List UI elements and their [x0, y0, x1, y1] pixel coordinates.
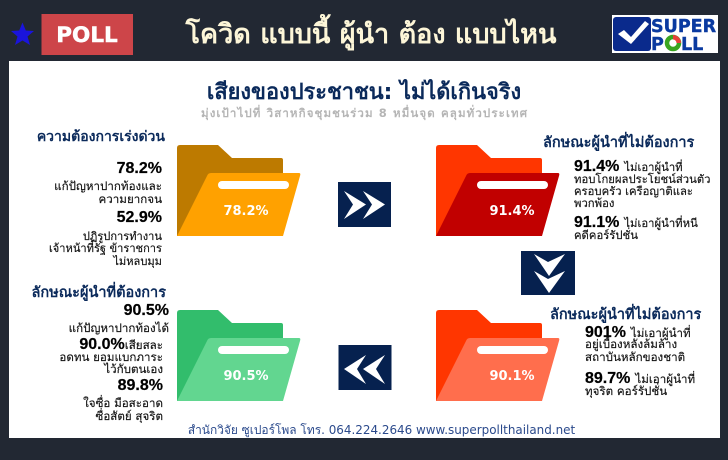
folder: red 91.4: 91.4% — [489, 204, 535, 219]
text: 91.4: ทอบโกยผลประโยชน์ส่วนตัว — [574, 172, 710, 186]
text: sacrifice: อดทน ยอมแบกภาระ — [59, 350, 163, 364]
heading: unwanted leader: ลักษณะผู้นำที่ไม่ต้องการ — [543, 131, 695, 151]
folder: orange 78.2: 78.2% — [223, 204, 269, 219]
logo: super poll: LL — [681, 35, 703, 55]
heading: urgent needs: ความต้องการเร่งด่วน — [37, 129, 165, 145]
text: 91.1: ไม่เอาผู้นำที่หนี — [623, 215, 698, 230]
text: reform: ปฏิรูปการทำงาน — [83, 230, 162, 243]
stat: 89.8: 89.8% — [118, 377, 163, 394]
text: honest: ซื่อสัตย์ สุจริต — [95, 408, 163, 423]
text: 90.1: อยู่เบื้องหลังล้มล้าง — [585, 335, 677, 352]
text: 90.1: สถาบันหลักของชาติ — [585, 350, 685, 364]
text: sacrifice: ไว้กับตนเอง — [103, 362, 163, 376]
text: 91.4: พวกพ้อง — [574, 197, 614, 210]
logo: super poll: SUPER — [651, 17, 717, 37]
icon: blue star — [11, 22, 34, 45]
folder: coral 90.1: 90.1% — [489, 369, 535, 384]
arrow: down — [521, 251, 575, 295]
folder: green 90.5: 90.5% — [223, 369, 269, 384]
badge: poll — [42, 14, 133, 55]
panel: unwanted leader text bottom — [550, 303, 702, 398]
text: economy: แก้ปัญหาปากท้องได้ — [69, 321, 169, 335]
text: 91.1: 91.1% — [574, 214, 619, 231]
text: reform: เจ้าหน้าที่รัฐ ข้าราชการ — [49, 240, 162, 255]
text: 89.7: 89.7% — [585, 370, 630, 387]
heading: desired leader: ลักษณะผู้นำที่ต้องการ — [32, 281, 166, 301]
stat: 90.5: 90.5% — [124, 302, 169, 319]
badge: poll: POLL — [56, 23, 118, 48]
stat: 52.9: 52.9% — [117, 209, 162, 226]
logo: super poll — [612, 15, 718, 55]
text: 89.7: ไม่เอาผู้นำที่ — [634, 371, 695, 387]
logo: super poll: P — [651, 35, 664, 55]
subheading: มุ่งเป้าไปที่ วิสาหกิจชุมชนร่วม 8 หมื่นจุด คลุมทั่วประเทศ — [201, 104, 528, 121]
panel: unwanted leader text top — [543, 131, 710, 242]
text: 91.4: 91.4% — [574, 158, 619, 175]
text: 90.1: ไม่เอาผู้นำที่ — [630, 325, 691, 341]
text: 91.4: ไม่เอาผู้นำที่ — [623, 159, 683, 174]
stat: 78.2: 78.2% — [117, 160, 162, 177]
folder: green 90.5 — [177, 310, 300, 401]
arrow: right — [338, 182, 391, 227]
footer: contact: สำนักวิจัย ซูเปอร์โพล โทร. 064.224.2646 www.superpollthailand.net — [188, 423, 575, 438]
folder: red 91.4 — [436, 145, 559, 236]
heading: unwanted leader: ลักษณะผู้นำที่ไม่ต้องการ — [550, 303, 702, 323]
arrow: left — [338, 345, 392, 390]
text: 90.1: 901% — [585, 324, 626, 341]
text: honest: ใจซื่อ มือสะอาด — [83, 395, 163, 410]
folder: coral 90.1 — [436, 310, 559, 401]
text: reform: ไม่หลบมุม — [112, 255, 162, 268]
text: 91.4: ครอบครัว เครือญาติและ — [574, 185, 693, 198]
heading: main: เสียงของประชาชน: ไม่ได้เกินจริง — [207, 79, 521, 105]
text: 89.7: ทุจริต คอร์รัปชั่น — [585, 383, 667, 398]
stat: 90.0: 90.0%เสียสละ — [79, 336, 163, 353]
panel: urgent needs text — [37, 129, 165, 268]
text: 91.1: คดีคอร์รัปชั่น — [574, 227, 638, 242]
title: โควิด แบบนี้ ผู้นำ ต้อง แบบไหน — [185, 13, 557, 51]
folder: orange 78.2 — [177, 145, 300, 236]
text: economy: ความยากจน — [99, 192, 162, 206]
panel: desired leader text — [32, 281, 169, 423]
text: economy: แก้ปัญหาปากท้องและ — [54, 179, 162, 193]
